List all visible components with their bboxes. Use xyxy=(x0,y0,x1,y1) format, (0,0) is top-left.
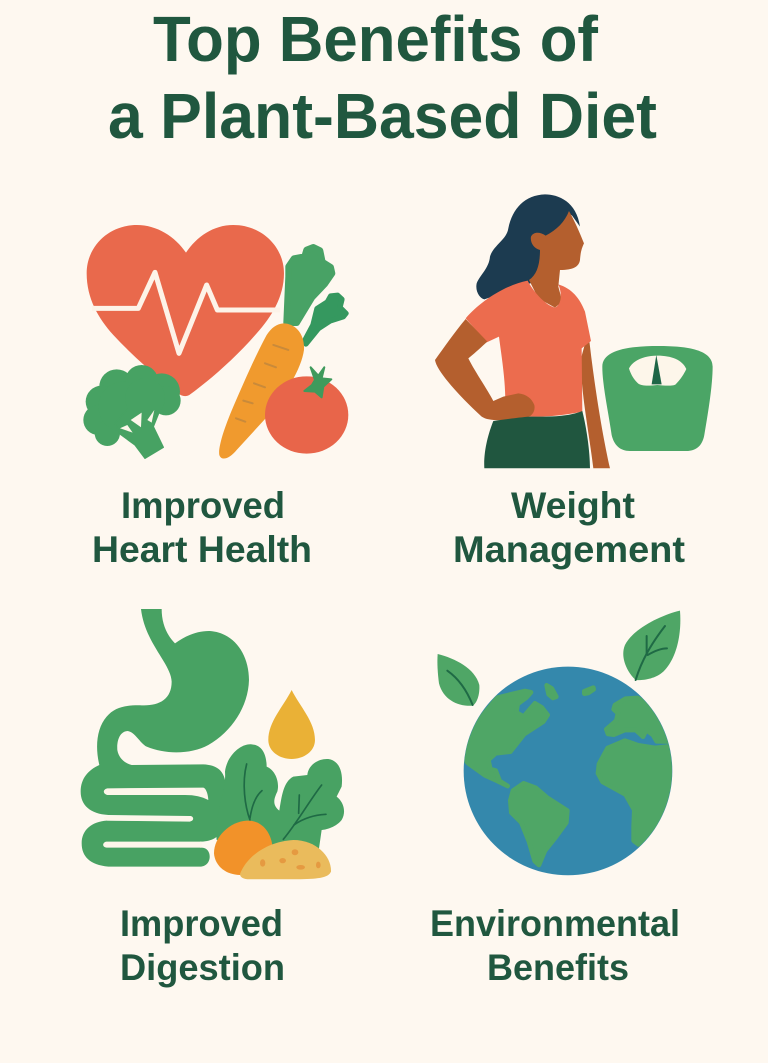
icon: carrot xyxy=(219,323,304,459)
icon: stomach and intestine xyxy=(81,609,249,867)
icon: leafy greens xyxy=(216,744,344,853)
label: improved heart health: Heart Health xyxy=(92,529,312,570)
icon: orange vegetable xyxy=(214,821,272,875)
label: improved heart health xyxy=(92,485,312,570)
label: environmental benefits: Benefits xyxy=(487,947,629,988)
panel: weight management xyxy=(435,194,713,570)
title: a Plant-Based Diet xyxy=(108,80,657,152)
label: weight management: Management xyxy=(453,529,685,570)
icon: scale xyxy=(602,346,713,451)
icon: heart with pulse xyxy=(87,225,284,396)
label: improved digestion: Improved xyxy=(120,903,283,944)
label: environmental benefits xyxy=(430,903,680,988)
title: Top Benefits of xyxy=(153,3,599,75)
title xyxy=(108,3,657,152)
icon: broccoli xyxy=(83,365,181,458)
label: improved digestion: Digestion xyxy=(120,947,285,988)
infographic xyxy=(80,14,713,988)
label: environmental benefits: Environmental xyxy=(430,903,680,944)
icon: carrot greens xyxy=(287,247,346,344)
label: weight management xyxy=(453,485,685,570)
icon: oil drop xyxy=(268,690,315,759)
icon: globe xyxy=(462,667,678,875)
icon: woman and scale xyxy=(435,194,713,468)
icon: digestive system and foods xyxy=(81,609,344,879)
icon: grain bread xyxy=(240,840,331,879)
label: improved digestion xyxy=(120,903,285,988)
panel: improved heart health xyxy=(83,225,348,570)
icon: woman xyxy=(435,194,610,468)
icon: right leaf xyxy=(623,611,680,680)
icon: left leaf xyxy=(437,654,479,706)
icon: heart and vegetables xyxy=(83,225,348,459)
panel: environmental benefits xyxy=(430,611,680,988)
label: weight management: Weight xyxy=(511,485,635,526)
icon: globe with leaves xyxy=(437,611,680,875)
panel: improved digestion xyxy=(81,609,344,988)
label: improved heart health: Improved xyxy=(121,485,285,526)
icon: tomato xyxy=(265,367,348,454)
